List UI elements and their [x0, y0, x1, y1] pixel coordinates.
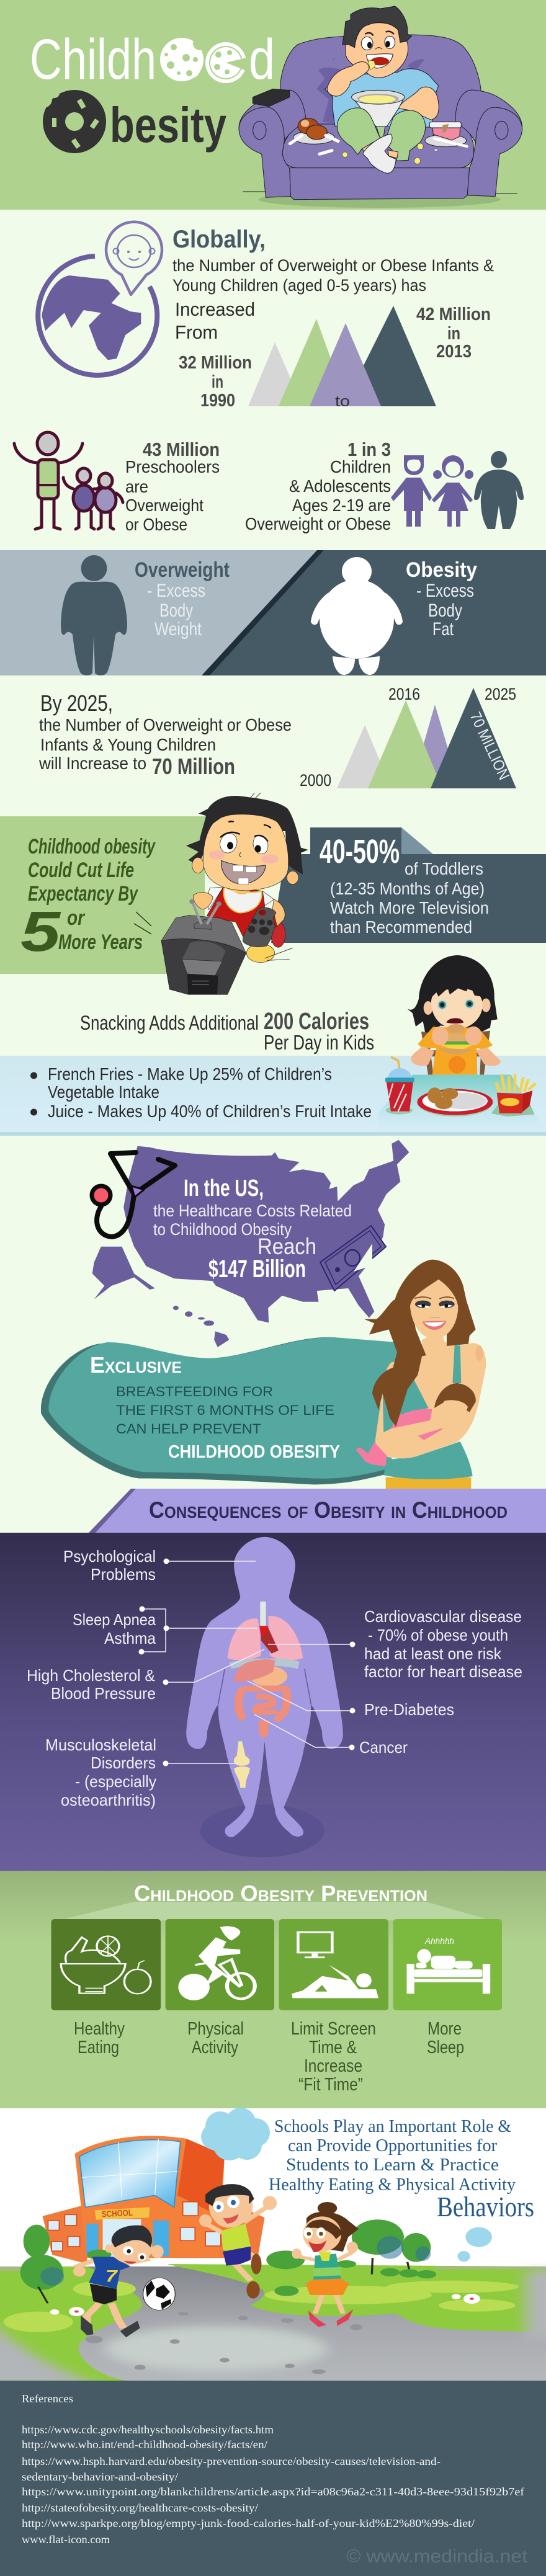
text: references list: https://www.cdc.gov/healthyschools/obesity/facts.htm	[22, 2423, 274, 2436]
text: obesity definition: Fat	[432, 619, 454, 640]
labels: prevention actions: Limit Screen	[291, 2019, 376, 2039]
callout: 40-50% of toddlers: (12-35 Months of Age)	[330, 879, 485, 898]
illustration: children playing: 7	[105, 2267, 119, 2285]
text: life expectancy: More Years	[58, 930, 143, 954]
text: healthcare costs: In the US,	[184, 1175, 264, 1201]
text: 43 million preschoolers	[125, 439, 220, 534]
labels: right consequences: - 70% of obese youth	[368, 1626, 508, 1644]
labels: prevention actions	[74, 2019, 464, 2095]
text: 1 in 3 children: & Adolescents	[289, 476, 391, 496]
text: overweight definition: Body	[159, 600, 193, 621]
text block: by 2025: the Number of Overweight or Obese	[39, 715, 292, 734]
cloud	[201, 2108, 270, 2160]
text block: number of infants: Increased	[175, 298, 255, 320]
shape: teal blob	[41, 1337, 400, 1484]
callout: 40-50% of toddlers: Watch More Television	[330, 898, 489, 917]
labels: right consequences: had at least one risk	[364, 1644, 502, 1663]
illustration: girl eating burger	[378, 955, 545, 1131]
text: 1 in 3 children: Overweight or Obese	[245, 514, 391, 533]
labels: prevention actions: More	[427, 2019, 462, 2039]
text: life expectancy	[20, 835, 156, 963]
panel: overweight vs obesity	[0, 550, 546, 675]
map: United States	[92, 1140, 409, 1347]
labels: left consequences: Blood Pressure	[51, 1684, 156, 1703]
list: snacking facts: Vegetable Intake	[48, 1082, 159, 1102]
text block: number of infants: Young Children (aged 0-5 years) has	[172, 276, 426, 295]
text: life expectancy: Could Cut Life	[28, 858, 134, 882]
text: schools role: Healthy Eating & Physical Activity	[269, 2175, 516, 2195]
labels: left consequences: Sleep Apnea	[73, 1610, 156, 1629]
labels: right consequences	[359, 1607, 522, 1757]
illustration: boy eating on armchair	[239, 6, 522, 208]
heading: snacking calories: 200 Calories	[264, 1009, 369, 1035]
callout: 40-50% of toddlers: than Recommended	[330, 917, 472, 937]
labels: left consequences: Asthma	[104, 1629, 156, 1647]
labels: prevention actions: Time &	[309, 2038, 357, 2057]
chart: projection mountains: 2025	[485, 685, 516, 703]
labels: prevention actions: Eating	[78, 2038, 119, 2057]
tile: physical activity	[166, 1919, 274, 2010]
list: snacking facts: French Fries - Make Up 25% of Children’s	[48, 1064, 332, 1084]
text block: by 2025: By 2025,	[40, 690, 113, 716]
chart: rising mountains	[248, 306, 436, 410]
illustration: ground and road	[0, 2264, 546, 2386]
text: healthcare costs: $147 Billion	[208, 1255, 306, 1283]
title: Obesity: besity	[110, 97, 226, 153]
text: exclusive breastfeeding	[90, 1352, 340, 1462]
callout: 40-50% of toddlers: 40-50%	[320, 833, 400, 870]
icon: children holding hands	[391, 451, 524, 529]
panel: global increase	[38, 222, 494, 411]
panel: references	[0, 2381, 546, 2576]
text: 43 million preschoolers: are	[125, 477, 148, 496]
heading: snacking calories: Snacking Adds Additional	[80, 1012, 259, 1034]
text: 43 million preschoolers: or Obese	[125, 515, 187, 534]
text: references list: http://www.sparkpe.org/blog/empty-junk-food-calories-half-of-your-kid%E2%80%99s-diet/	[22, 2517, 475, 2529]
sign: school: SCHOOL	[102, 2208, 133, 2219]
panel: snacking	[0, 955, 546, 1136]
text block: number of infants: the Number of Overweight or Obese Infants &	[172, 256, 494, 275]
callout lines	[139, 1558, 355, 1767]
illustration: mother nursing baby	[356, 1260, 486, 1489]
labels: right consequences: factor for heart disease	[364, 1662, 522, 1681]
chart: rising mountains: to	[335, 393, 350, 410]
labels: left consequences: - (especially	[75, 1772, 156, 1791]
chart: projection mountains: 2016	[388, 685, 420, 703]
stat: 42 million in 2013: in	[447, 324, 460, 344]
text: life expectancy: Expectancy By	[28, 882, 139, 906]
text: obesity definition: - Excess	[416, 581, 474, 601]
text: references list: http://www.who.int/end-childhood-obesity/facts/en/	[22, 2438, 267, 2451]
stat: 42 million in 2013: 2013	[436, 342, 472, 362]
list: snacking facts	[30, 1064, 372, 1121]
list: snacking facts: Juice - Makes Up 40% of Children’s Fruit Intake	[48, 1102, 372, 1121]
watermark: © www.medindia.net	[346, 2546, 528, 2567]
text: references list: www.flat-icon.com	[22, 2533, 110, 2546]
text: overweight definition: - Excess	[147, 581, 205, 601]
labels: right consequences: Cancer	[359, 1738, 408, 1757]
text: exclusive breastfeeding: Exclusive	[90, 1352, 182, 1378]
labels: prevention actions: “Fit Time”	[298, 2075, 363, 2095]
heading bar: consequences	[89, 1489, 546, 1533]
panel: header	[0, 0, 546, 210]
labels: left consequences	[27, 1547, 156, 1809]
text block: number of infants: From	[175, 321, 218, 343]
panel: US healthcare costs	[92, 1140, 409, 1347]
text block: by 2025: Infants & Young Children	[40, 735, 216, 754]
stat: 32 million in 1990: 1990	[200, 391, 235, 411]
tile: more sleep: Ahhhhh	[424, 1936, 454, 1946]
text: life expectancy: 5	[20, 900, 61, 963]
chart: projection mountains: 2000	[300, 771, 331, 790]
labels: prevention actions: Activity	[192, 2038, 238, 2057]
text: exclusive breastfeeding: CHILDHOOD OBESITY	[168, 1442, 340, 1462]
icon: obese figure	[311, 557, 403, 675]
tile: more sleep	[393, 1919, 502, 2010]
text: exclusive breastfeeding: CAN HELP PREVENT	[116, 1421, 261, 1437]
text: exclusive breastfeeding: THE FIRST 6 MONTHS OF LIFE	[116, 1402, 334, 1418]
panel: 2025 projection	[38, 685, 516, 790]
text: 43 million preschoolers: Preschoolers	[125, 457, 220, 476]
text: references list: https://www.unitypoint.org/blankchildrens/article.aspx?id=a08c96a2-c311-40d3-8eee-93d15f92b7ef	[22, 2485, 524, 2498]
text: life expectancy: or	[67, 906, 85, 930]
heading: snacking calories: Per Day in Kids	[264, 1031, 374, 1054]
panel: breastfeeding	[41, 1260, 486, 1489]
text: references list: References	[22, 2392, 73, 2405]
stat: 42 million in 2013	[416, 305, 491, 362]
text: schools role	[269, 2117, 534, 2222]
illustration: school building	[42, 2136, 265, 2264]
text: references list: https://www.hsph.harvard.edu/obesity-prevention-source/obesity-causes/television-and-	[22, 2455, 441, 2467]
stat: 32 million in 1990	[179, 353, 252, 411]
icon: overweight figure	[61, 555, 127, 675]
title: Childhood: Childh	[30, 28, 156, 91]
text: references list: sedentary-behavior-and-obesity/	[22, 2471, 178, 2483]
labels: right consequences: Cardiovascular disease	[364, 1607, 522, 1626]
callout: 40-50% of toddlers: of Toddlers	[405, 859, 483, 878]
title: Obesity: O	[56, 103, 85, 145]
panel: schools	[0, 2108, 546, 2386]
heading: prevention: Childhood Obesity Prevention	[134, 1881, 427, 1906]
labels: prevention actions: Increase	[304, 2056, 362, 2076]
text: references list: http://stateofobesity.org/healthcare-costs-obesity/	[22, 2502, 258, 2514]
panel: life expectancy and television	[0, 793, 546, 994]
text: 1 in 3 children: Ages 2-19 are	[292, 496, 391, 515]
text: healthcare costs: Reach	[257, 1234, 316, 1259]
icon: family figures	[14, 432, 123, 529]
callout: 40-50% of toddlers	[271, 827, 546, 943]
chart: projection mountains: 70 MILLION	[467, 710, 512, 783]
text: 43 million preschoolers: Overweight	[125, 496, 204, 515]
text: overweight definition: Weight	[154, 619, 202, 640]
text: 1 in 3 children	[245, 439, 391, 533]
text block: by 2025	[38, 690, 292, 779]
stat: 32 million in 1990: in	[212, 372, 223, 392]
text: exclusive breastfeeding: BREASTFEEDING FOR	[116, 1384, 273, 1399]
labels: left consequences: Problems	[91, 1565, 156, 1584]
text: references list	[22, 2392, 524, 2546]
icon: dollar bill	[320, 1226, 386, 1291]
illustration: child body with organs	[186, 1537, 343, 1857]
labels: prevention actions: Physical	[187, 2019, 244, 2039]
text block: number of infants	[172, 256, 494, 343]
icon: globe with baby pin	[38, 222, 162, 375]
title: Childhood: oo	[165, 34, 243, 89]
labels: left consequences: Disorders	[91, 1754, 156, 1772]
tile: healthy eating	[51, 1919, 161, 2010]
title: Childhood	[30, 28, 275, 91]
text: 1 in 3 children: 1 in 3	[347, 439, 391, 460]
heading: snacking calories	[80, 1009, 374, 1054]
illustration: children playing	[20, 2184, 492, 2337]
text: 1 in 3 children: Children	[330, 457, 391, 476]
heading bar: consequences: Consequences of Obesity in Childhood	[149, 1497, 508, 1523]
text: obesity definition	[406, 558, 477, 640]
text: obesity definition: Obesity	[406, 558, 477, 582]
heading: Globally: Globally,	[172, 226, 266, 253]
labels: left consequences: Musculoskeletal	[45, 1736, 156, 1754]
tile: limit screen time	[279, 1919, 388, 2010]
text block: by 2025: will Increase to	[38, 754, 146, 773]
title: Childhood: d	[249, 28, 275, 91]
title: Obesity	[35, 88, 226, 153]
panel: prevention	[0, 1871, 546, 2108]
panel: consequences	[0, 1489, 546, 1872]
stat: 32 million in 1990: 32 Million	[179, 353, 252, 373]
text: 43 million preschoolers: 43 Million	[143, 439, 220, 460]
text: healthcare costs: the Healthcare Costs Related	[153, 1201, 352, 1220]
panel: preschoolers and adolescents	[14, 432, 524, 534]
text: schools role: Schools Play an Important Role &	[274, 2117, 511, 2136]
text: healthcare costs: to Childhood Obesity	[153, 1220, 292, 1239]
labels: prevention actions: Sleep	[427, 2038, 464, 2057]
text: overweight definition	[135, 558, 230, 640]
labels: left consequences: osteoarthritis)	[61, 1791, 156, 1809]
text: healthcare costs	[153, 1175, 352, 1283]
text: life expectancy: Childhood obesity	[28, 835, 156, 858]
icon: stethoscope	[92, 1152, 175, 1237]
chart: projection mountains	[300, 685, 516, 790]
labels: prevention actions: Healthy	[74, 2019, 125, 2039]
stat: 42 million in 2013: 42 Million	[416, 305, 491, 324]
labels: left consequences: Psychological	[63, 1547, 156, 1566]
labels: left consequences: High Cholesterol &	[27, 1666, 155, 1685]
text block: by 2025: 70 Million	[152, 754, 235, 779]
illustration: child with television	[161, 793, 308, 994]
text: schools role: can Provide Opportunities for	[288, 2136, 498, 2155]
text: overweight definition: Overweight	[135, 558, 230, 582]
text: obesity definition: Body	[428, 600, 462, 621]
text: schools role: Students to Learn & Practice	[286, 2155, 499, 2175]
labels: right consequences: Pre-Diabetes	[364, 1700, 454, 1719]
